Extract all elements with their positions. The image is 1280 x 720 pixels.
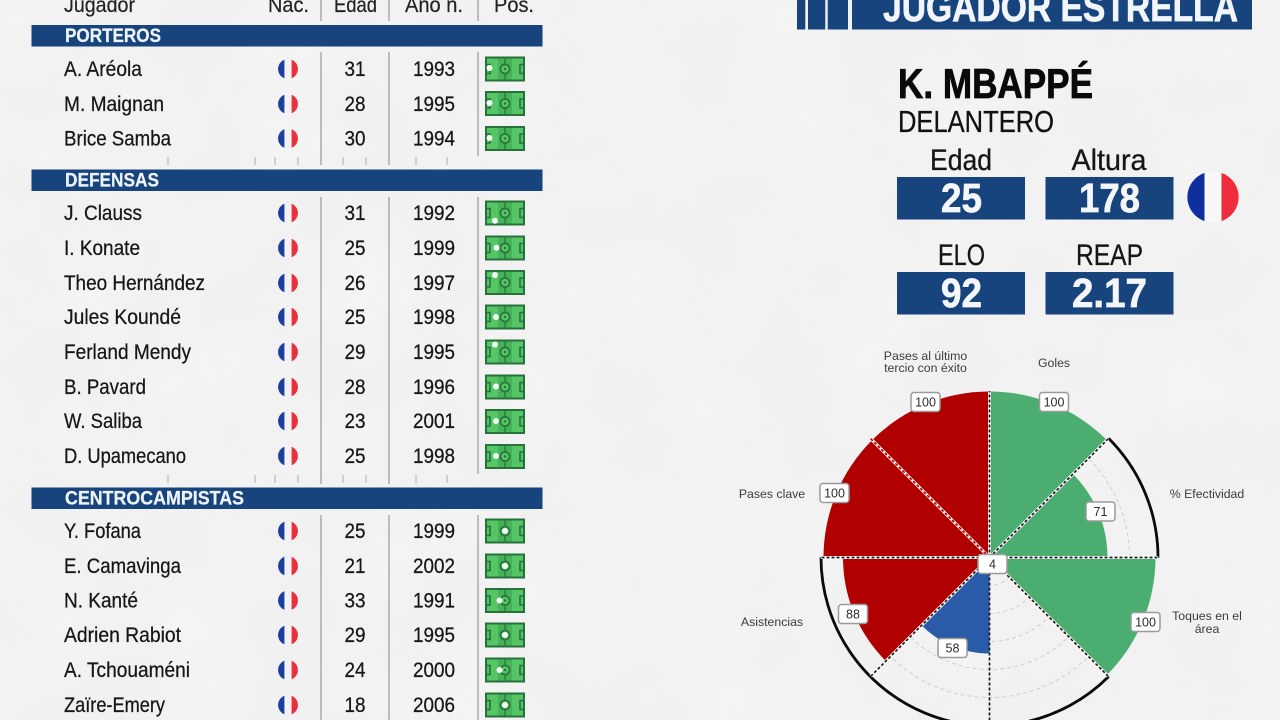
label: pases al último tercio con éxito: tercio con éxito (884, 361, 967, 375)
value: 58 (938, 638, 967, 658)
player: M. Maignan: 1995 (413, 93, 455, 116)
section heading: defensas: DEFENSAS (65, 170, 159, 192)
value: 100 pases clave (820, 484, 849, 502)
section heading: centrocampistas: CENTROCAMPISTAS (65, 488, 244, 510)
player: J. Clauss (64, 202, 524, 225)
stat: edad (897, 144, 1025, 221)
player: D. Upamecano: D. Upamecano (64, 445, 186, 468)
player: Jules Koundé (64, 306, 524, 329)
player: I. Konate: I. Konate (64, 237, 140, 260)
section heading: porteros: PORTEROS (65, 25, 161, 47)
player: M. Maignan: 28 (344, 93, 366, 116)
player: A. Tchouaméni: 24 (344, 659, 366, 682)
player: W. Saliba: W. Saliba (64, 410, 142, 433)
player: Ferland Mendy (64, 340, 524, 364)
player: A. Aréola (64, 58, 524, 81)
value: 100 pases clave: 100 (824, 486, 845, 500)
player: Brice Samba: Brice Samba (64, 128, 171, 150)
stat: reap: REAP (1076, 239, 1143, 272)
player: Theo Hernández: 1997 (413, 272, 455, 295)
player: J. Clauss: J. Clauss (64, 202, 142, 225)
player: D. Upamecano: 1998 (413, 445, 455, 468)
section heading: porteros (32, 25, 542, 47)
label: pases clave: Pases clave (739, 487, 805, 501)
player: B. Pavard (64, 376, 524, 399)
player: A. Tchouaméni (64, 658, 524, 682)
sector: pases clave (824, 440, 990, 558)
player: N. Kanté: 1991 (413, 590, 455, 612)
player: A. Aréola: 1993 (413, 58, 455, 81)
stat: edad: Edad (930, 144, 992, 177)
stat: reap: 2.17 (1072, 270, 1147, 316)
value: 4 (978, 554, 1007, 574)
stat: elo (897, 239, 1025, 316)
player name: K. MBAPPÉ (898, 60, 1093, 107)
player: E. Camavinga: E. Camavinga (64, 555, 181, 578)
player: N. Kanté (64, 589, 524, 612)
player: W. Saliba: 2001 (413, 410, 455, 433)
value: 58: 58 (946, 642, 959, 656)
icon: french flag (1187, 172, 1239, 222)
pizza chart (820, 391, 1160, 720)
value: 88 (838, 604, 868, 624)
sector: blue value 58 (922, 558, 990, 654)
label: goles: Goles (1038, 356, 1070, 370)
player: Adrien Rabiot: 29 (344, 624, 366, 647)
player: A. Tchouaméni: A. Tchouaméni (64, 659, 190, 682)
player: Y. Fofana: Y. Fofana (64, 520, 141, 543)
player: Ferland Mendy: 1995 (413, 341, 455, 364)
player: Zaïre-Emery: 18 (344, 694, 366, 717)
label: toques en el área: Toques en el (1172, 609, 1242, 623)
label: toques en el área (1172, 609, 1242, 636)
value: 100 toques (1131, 612, 1160, 632)
label: pases al último tercio con éxito (884, 349, 967, 375)
player: E. Camavinga (64, 554, 524, 578)
stat: altura: 178 (1079, 175, 1140, 221)
value: 71: 71 (1094, 505, 1107, 519)
player position: DELANTERO (898, 104, 1054, 139)
player: E. Camavinga: 2002 (413, 555, 455, 578)
player: Theo Hernández: Theo Hernández (64, 272, 205, 295)
stat: altura (1046, 144, 1174, 221)
player: N. Kanté: 33 (344, 590, 366, 612)
label: pases al último tercio con éxito: Pases al último (884, 349, 967, 363)
label: asistencias: Asistencias (741, 615, 803, 629)
section heading: defensas (32, 170, 542, 192)
player: Adrien Rabiot: Adrien Rabiot (64, 624, 181, 647)
player: B. Pavard: 28 (344, 376, 366, 399)
player: M. Maignan: M. Maignan (64, 93, 164, 116)
sector: efectividad (990, 474, 1108, 558)
player: E. Camavinga: 21 (344, 555, 366, 578)
value: 100 goles: 100 (1044, 396, 1064, 410)
player: Adrien Rabiot (64, 624, 524, 647)
stat: elo: ELO (938, 239, 985, 272)
player: Adrien Rabiot: 1995 (413, 624, 455, 647)
section heading: centrocampistas (32, 488, 542, 510)
player: Theo Hernández (64, 271, 524, 295)
value: 88: 88 (846, 608, 860, 622)
value: 4: 4 (989, 558, 996, 572)
player: Brice Samba: 1994 (413, 128, 455, 150)
player: N. Kanté: N. Kanté (64, 590, 138, 612)
player: B. Pavard: 1996 (413, 376, 455, 399)
stat: reap (1046, 239, 1174, 316)
player: W. Saliba: 23 (344, 410, 366, 433)
sector: goles (990, 391, 1107, 558)
value: 100 toques: 100 (1135, 616, 1156, 630)
player: Zaïre-Emery: Zaïre-Emery (64, 694, 165, 717)
value: 100 goles (1040, 392, 1068, 412)
player: M. Maignan (64, 92, 524, 116)
column dividers: porteros (168, 52, 478, 165)
player: Brice Samba (64, 127, 524, 150)
player: W. Saliba (64, 410, 524, 433)
value: 100 pases al último: 100 (915, 396, 936, 410)
player: Brice Samba: 30 (344, 128, 366, 150)
player: Zaïre-Emery: 2006 (413, 694, 455, 717)
player: Ferland Mendy: 29 (344, 341, 366, 364)
label: toques en el área: área (1195, 622, 1219, 636)
player: Jules Koundé: 1998 (413, 306, 455, 329)
player: Zaïre-Emery (64, 694, 524, 717)
column dividers: defensas (168, 197, 478, 484)
player: A. Tchouaméni: 2000 (413, 659, 455, 682)
player: Y. Fofana (64, 520, 524, 543)
player: J. Clauss: 1992 (413, 202, 455, 225)
player: B. Pavard: B. Pavard (64, 376, 146, 399)
value: 71 (1086, 502, 1115, 521)
player: J. Clauss: 31 (344, 202, 366, 225)
label: efectividad: % Efectividad (1170, 487, 1244, 501)
value: 100 pases al último (911, 392, 940, 412)
player: Jules Koundé: Jules Koundé (64, 306, 181, 329)
player: I. Konate (64, 236, 524, 260)
player: D. Upamecano: 25 (344, 445, 366, 468)
sector: pases al último tercio (872, 392, 990, 558)
sector: toques en el área (990, 558, 1156, 675)
player: Y. Fofana: 25 (344, 520, 366, 543)
player: Ferland Mendy: Ferland Mendy (64, 341, 191, 364)
player: I. Konate: 25 (344, 237, 366, 260)
player: A. Aréola: A. Aréola (64, 58, 142, 81)
table header (64, 0, 534, 21)
stat: edad: 25 (941, 175, 982, 221)
player: Y. Fofana: 1999 (413, 520, 455, 543)
stat: elo: 92 (941, 270, 982, 316)
player: A. Aréola: 31 (344, 58, 366, 81)
player: I. Konate: 1999 (413, 237, 455, 260)
player: D. Upamecano (64, 445, 524, 468)
player: Theo Hernández: 26 (344, 272, 366, 295)
stat: altura: Altura (1072, 144, 1147, 177)
column dividers: centrocampistas (321, 515, 478, 720)
sector: asistencias (843, 558, 990, 661)
player: Jules Koundé: 25 (344, 306, 366, 329)
